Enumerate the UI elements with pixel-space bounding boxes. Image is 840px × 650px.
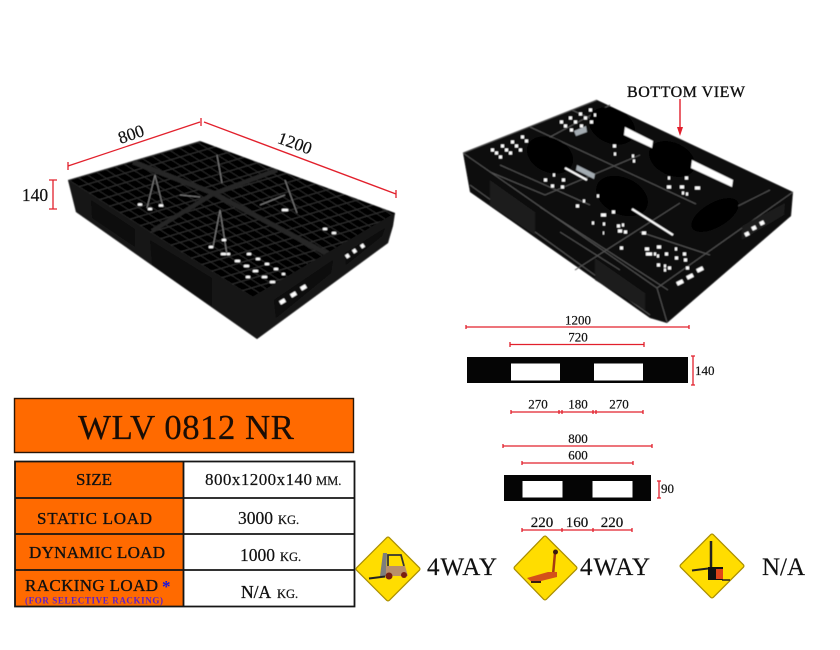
label: 4WAY: 4WAY [580,554,650,581]
row: size [76,470,341,489]
row: racking load: RACKING LOAD [25,576,158,595]
row: static load: STATIC LOAD [37,509,152,528]
white small holes [491,110,700,270]
specification table [15,462,354,606]
row: dynamic load [29,543,301,565]
pallet silhouette [463,100,793,323]
row: racking load: KG. [277,587,298,601]
pallet silhouette [68,141,395,339]
left side face [68,180,257,339]
white see-through holes [139,204,335,282]
structure lines [463,100,793,322]
row: dynamic load: 1000 [240,545,275,565]
model title banner: WLV 0812 NR [78,408,295,447]
pallet truck access rating [516,538,650,598]
fork openings [522,481,562,498]
dimension lines [466,325,695,414]
label: BOTTOM VIEW [627,84,746,101]
row: dynamic load: KG. [280,550,301,564]
right side face [252,213,395,339]
dimension lines: top view [22,118,396,209]
fork openings [511,364,560,380]
row: size: MM. [316,474,341,488]
dimension labels: 180 [568,396,588,412]
dimension labels: 800 [568,431,588,446]
icon: pallet truck sign [516,538,575,598]
row: static load: 3000 [238,508,273,528]
label 1200: 1200 [275,128,315,158]
row: size: 800x1200x140 [205,470,312,489]
row: dynamic load: DYNAMIC LOAD [29,543,165,562]
dimension labels [528,312,714,412]
row: racking load [25,576,298,606]
top deck grid [68,141,395,297]
label: 4WAY: 4WAY [427,554,497,581]
icon: forklift sign [358,539,418,599]
dimension labels: 600 [568,448,588,462]
dimension labels: 270 [528,396,548,412]
dimension labels: 160 [566,515,588,531]
dimension labels [531,431,674,531]
row: static load [37,508,299,528]
row: racking load: N/A [241,582,272,602]
dimension labels: 220 [601,515,623,531]
profile bar [504,475,651,501]
dimension labels: 140 [695,363,714,378]
dimension labels: 220 [531,515,553,531]
white end holes [677,222,764,284]
large white slots [624,127,733,187]
label: N/A: N/A [762,554,805,581]
white end holes [280,245,364,303]
icon: stacker sign [682,536,742,596]
label column [15,462,183,606]
row: static load: KG. [278,513,299,527]
dimension labels: 90 [661,481,674,496]
table grid [15,462,354,606]
profile bar [467,357,688,383]
pallet photo: bottom view [463,100,793,323]
recessed wells [521,100,744,238]
thin white slots [565,168,673,235]
row: racking load: (FOR SELECTIVE RACKING) [25,596,163,606]
dimension labels: 1200 [565,312,591,328]
row: size: SIZE [76,470,112,489]
row: racking load: * [162,577,170,596]
label 140: 140 [22,185,48,205]
forklift access rating [358,539,497,599]
short side profile diagram [503,431,674,532]
model title banner [14,398,354,452]
dimension labels: 720 [568,330,588,344]
stacker access rating [682,536,805,596]
dimension labels: 270 [609,396,629,412]
fork pockets [91,200,385,318]
label 800: 800 [115,120,147,148]
arrow [679,99,681,128]
long side profile diagram [466,312,714,414]
side pockets [490,180,785,310]
pallet photo: top view [68,141,395,339]
bottom view callout [627,84,746,136]
metal inserts [574,126,595,179]
dimension lines [503,444,661,532]
